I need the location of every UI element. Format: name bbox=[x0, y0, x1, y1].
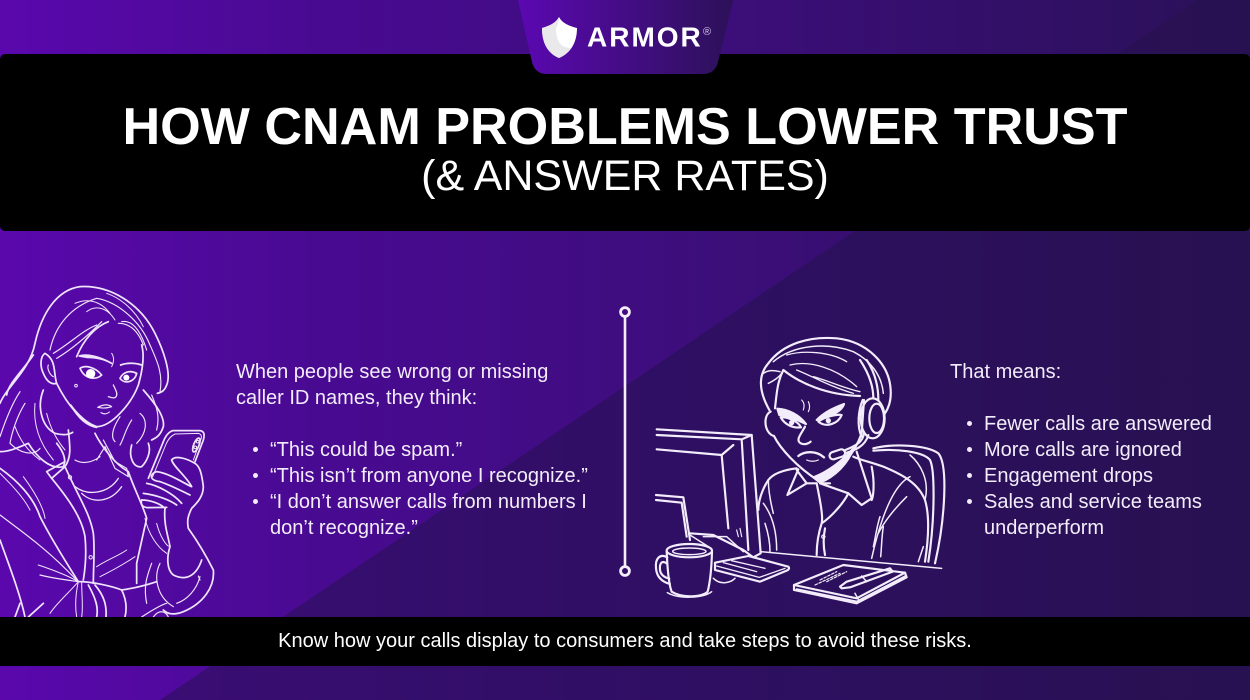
torso and shirt bbox=[758, 452, 928, 562]
subtitle: (& ANSWER RATES) bbox=[421, 152, 829, 200]
hair bbox=[761, 338, 891, 413]
jacket bbox=[0, 467, 168, 617]
bullet list: underperform bbox=[984, 517, 1104, 539]
footer banner bbox=[0, 617, 1250, 666]
phone bbox=[141, 431, 204, 508]
hand and sleeve bbox=[142, 458, 213, 614]
logo tab bbox=[518, 0, 733, 74]
bullet list: “This could be spam.” bbox=[270, 439, 462, 461]
face bbox=[41, 322, 143, 427]
divider timeline bbox=[619, 306, 631, 577]
bullet list: Fewer calls are answered bbox=[984, 413, 1212, 435]
bullet list bbox=[253, 439, 588, 539]
chair bbox=[873, 446, 944, 563]
intro text bbox=[236, 361, 548, 409]
notebook and pen bbox=[794, 565, 907, 603]
lead-in text: That means: bbox=[950, 361, 1061, 383]
desk line bbox=[761, 552, 942, 568]
illustration: woman with phone bbox=[0, 286, 214, 617]
face bbox=[765, 400, 864, 483]
registered mark: ® bbox=[703, 26, 711, 38]
neck and collar bbox=[47, 430, 147, 583]
hair outline bbox=[0, 287, 168, 467]
footer text: Know how your calls display to consumers and take steps to avoid these risks. bbox=[278, 630, 972, 652]
title banner bbox=[0, 54, 1250, 231]
bullet list bbox=[967, 413, 1212, 539]
intro text: caller ID names, they think: bbox=[236, 387, 477, 409]
bullet list: don’t recognize.” bbox=[270, 517, 418, 539]
logo wordmark: ARMOR bbox=[587, 22, 703, 52]
bullet list: Sales and service teams bbox=[984, 491, 1202, 513]
bullet list: Engagement drops bbox=[984, 465, 1153, 487]
bullet list: More calls are ignored bbox=[984, 439, 1182, 461]
intro text: When people see wrong or missing bbox=[236, 361, 548, 383]
keyboard bbox=[713, 556, 789, 583]
headset bbox=[829, 360, 885, 460]
right text block bbox=[950, 361, 1212, 539]
monitor bbox=[656, 429, 761, 557]
coffee cup bbox=[656, 544, 712, 597]
bullet list: “This isn’t from anyone I recognize.” bbox=[270, 465, 588, 487]
illustration: frustrated agent at desk bbox=[654, 336, 946, 604]
title: HOW CNAM PROBLEMS LOWER TRUST bbox=[122, 98, 1128, 156]
bullet list: “I don’t answer calls from numbers I bbox=[270, 491, 587, 513]
left text block bbox=[236, 361, 588, 539]
icon: shield bbox=[542, 17, 577, 58]
